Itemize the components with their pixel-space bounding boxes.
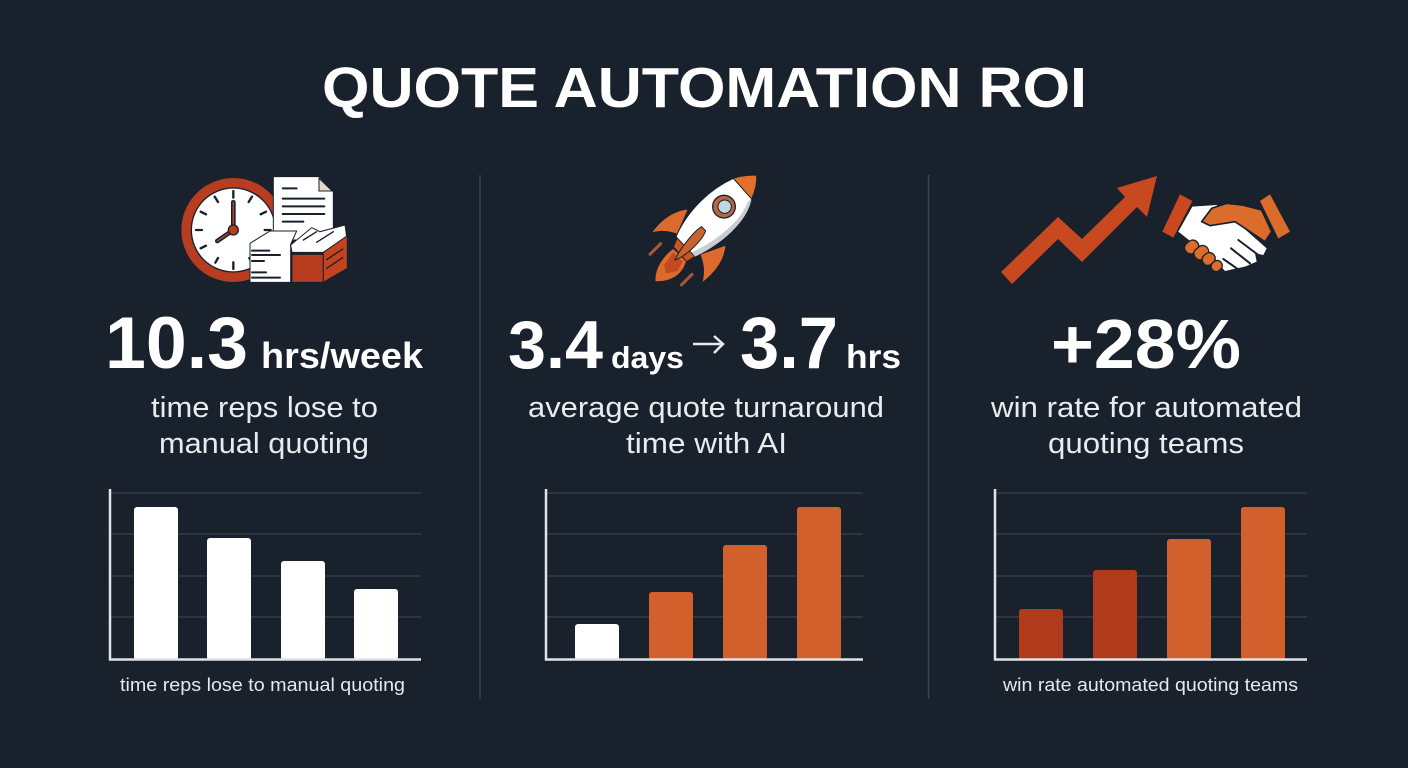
stat: 3.4 days to 3.7 hrs [508,303,901,384]
stat: 3.4 days to 3.7 hrs: 3.7 [740,303,838,384]
icon: clock with paper stacks [181,177,347,282]
stat: 3.4 days to 3.7 hrs: hrs [846,338,901,375]
description: win rate [990,392,1302,460]
bar chart: descending white bars [110,489,421,660]
stat: 3.4 days to 3.7 hrs: 3.4 [508,307,603,383]
icon: rocket [650,175,757,285]
description: quote turnaround: time with AI [626,428,787,460]
description: quote turnaround: average quote turnaround [528,392,884,424]
title: QUOTE AUTOMATION ROI [322,56,1087,120]
stat: 10.3 hrs/week: 10.3 [105,303,248,384]
description: time reps lose [151,392,378,460]
description: quote turnaround [528,392,884,460]
icon: handshake [1162,194,1290,273]
bar chart: rising bars [546,489,863,660]
chart caption: win rate automated quoting teams [1002,674,1298,695]
stat: +28%: +28% [1051,305,1241,383]
arrow: from days to hours [693,336,723,353]
description: time reps lose: manual quoting [159,428,369,460]
panel: time lost to manual quoting [105,177,424,695]
chart caption: time reps lose to manual quoting [120,674,405,695]
stat: 10.3 hrs/week: hrs/week [261,335,424,376]
panel: win rate [990,176,1307,695]
panel: quote turnaround time [508,175,901,660]
description: win rate: quoting teams [1048,428,1244,460]
description: time reps lose: time reps lose to [151,392,378,424]
stat: 10.3 hrs/week [105,303,424,384]
stat: 3.4 days to 3.7 hrs: days [611,340,684,375]
icon: rising arrow [1001,176,1157,284]
bar chart: rising red and orange bars [995,489,1307,660]
description: win rate: win rate for automated [990,392,1302,424]
